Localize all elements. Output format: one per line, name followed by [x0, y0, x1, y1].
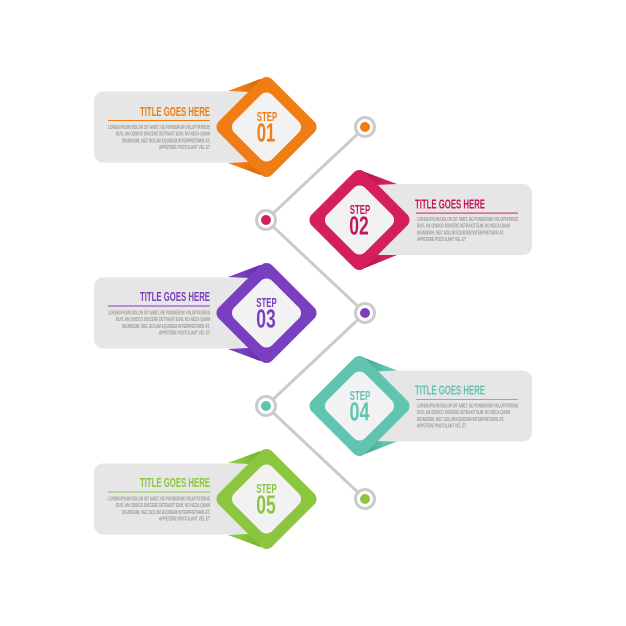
node: teal [256, 396, 276, 416]
body text: APPETERE POSTULANT VEL ET [159, 517, 210, 523]
node: green [356, 490, 374, 508]
step label: STEP [350, 202, 370, 217]
step label: STEP [256, 481, 277, 496]
text card background [360, 184, 532, 255]
title rule [108, 492, 210, 493]
body text: DIGNISSIM, NEC SOLUM EQUIDEM INTERPRETARIS AT, [122, 324, 210, 330]
title: TITLE GOES HERE [415, 382, 485, 398]
body text: DUO, AN ODIOCO DISCERE DETRAXIT EUM, NO NECA QUAM [116, 503, 210, 509]
body text: LOREM IPSUM DOLOR SIT AMET, NE PONDERUM VOLUPTATIBUS [108, 310, 210, 316]
body text [108, 310, 210, 337]
panel: step 03 [94, 260, 320, 366]
step label: STEP [256, 295, 277, 310]
body text: APPETERE POSTULANT VEL ET [159, 145, 210, 151]
folded ribbon corners [228, 265, 270, 361]
step number: 04 [350, 398, 370, 426]
body text: LOREM IPSUM DOLOR SIT AMET, NE PONDERUM VOLUPTATIBUS [417, 404, 518, 410]
diamond badge [306, 353, 413, 459]
diamond inner [322, 368, 397, 444]
folded ribbon corners [355, 172, 397, 268]
panel: step 04 [306, 353, 532, 459]
body text [417, 404, 518, 430]
diamond inner [229, 461, 304, 537]
step label: STEP [350, 388, 370, 403]
body text: LOREM IPSUM DOLOR SIT AMET, NE PONDERUM VOLUPTATIBUS [108, 125, 210, 131]
panel: step 02 [306, 167, 532, 273]
title: TITLE GOES HERE [415, 196, 485, 211]
diamond badge [213, 74, 320, 180]
step label: STEP [257, 109, 277, 124]
diamond badge [306, 167, 413, 273]
body text: LOREM IPSUM DOLOR SIT AMET, NE PONDERUM VOLUPTATIBUS [108, 496, 210, 502]
body text: DUO, AN ODIOCO DISCERE DETRAXIT EUM, NO NECA QUAM [417, 224, 510, 230]
text card background [94, 92, 266, 162]
step number: 05 [256, 492, 276, 520]
body text: APPETERE POSTULANT VEL ET [159, 331, 210, 337]
body text [108, 496, 210, 523]
folded ribbon corners [228, 451, 270, 547]
title rule [108, 306, 210, 307]
step number: 02 [349, 212, 369, 240]
body text: LOREM IPSUM DOLOR SIT AMET, NE PONDERUM VOLUPTATIBUS [417, 217, 518, 223]
diamond badge [213, 446, 320, 552]
diamond inner [229, 275, 304, 351]
body text: APPETERE POSTULANT VEL ET [417, 237, 466, 243]
step number: 01 [257, 120, 275, 148]
step number: 03 [256, 306, 276, 334]
node: crimson [256, 210, 276, 230]
body text: APPETERE POSTULANT VEL ET [417, 424, 466, 430]
title: TITLE GOES HERE [140, 104, 210, 119]
body text: DUO, AN ODIOCO DISCERE DETRAXIT EUM, NO NECA QUAM [116, 317, 210, 323]
folded ribbon corners [355, 358, 397, 454]
body text [108, 125, 210, 151]
title rule [416, 399, 518, 400]
folded ribbon corners [228, 79, 270, 175]
title rule [416, 213, 518, 214]
diamond badge [213, 260, 320, 366]
connector path [266, 127, 365, 499]
body text: DUO, AN ODIOCO DISCERE DETRAXIT EUM, NO NECA QUAM [417, 410, 510, 416]
node: purple [356, 304, 374, 322]
title: TITLE GOES HERE [140, 289, 210, 304]
body text: DIGNISSIM, NEC SOLUM EQUIDEM INTERPRETARIS AT, [122, 510, 210, 516]
text card background [360, 370, 532, 442]
panel: step 01 [94, 74, 320, 180]
body text: DIGNISSIM, NEC SOLUM EQUIDEM INTERPRETARIS AT, [417, 417, 504, 423]
text card background [94, 464, 266, 534]
body text: DIGNISSIM, NEC SOLUM EQUIDEM INTERPRETARIS AT, [122, 138, 210, 144]
diamond inner [322, 182, 397, 258]
body text: DUO, AN ODIOCO DISCERE DETRAXIT EUM, NO NECA QUAM [116, 132, 210, 138]
title: TITLE GOES HERE [140, 475, 210, 490]
panel: step 05 [94, 446, 320, 552]
node: orange [356, 118, 374, 136]
body text [417, 217, 518, 243]
diamond inner [229, 89, 304, 165]
title rule [108, 120, 210, 121]
text card background [94, 278, 266, 348]
body text: DIGNISSIM, NEC SOLUM EQUIDEM INTERPRETARIS AT, [417, 230, 504, 236]
